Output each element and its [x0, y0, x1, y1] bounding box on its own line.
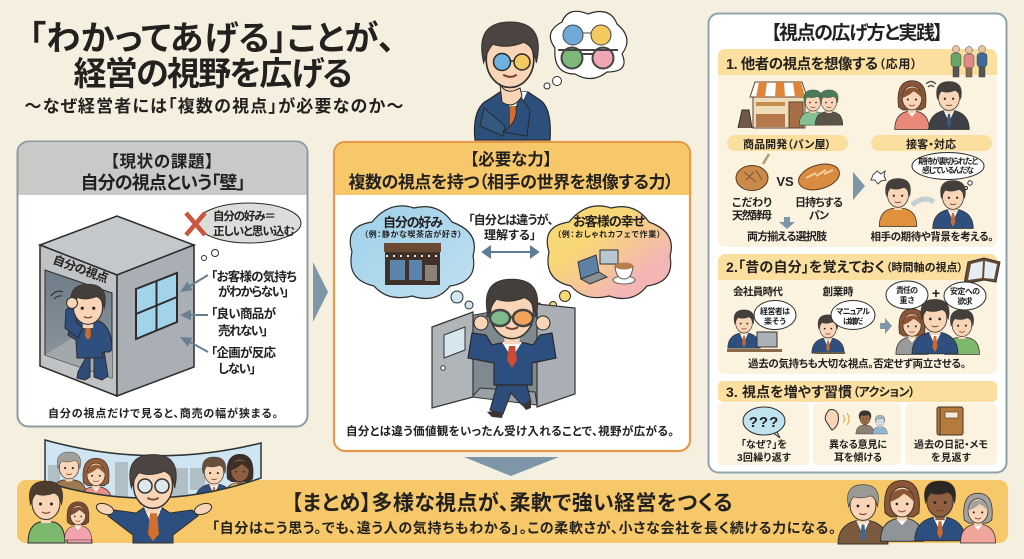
quotes list: 「お客様の気持ち — [211, 269, 297, 284]
group of four people — [838, 481, 996, 544]
speech bubble: manuals — [831, 300, 875, 330]
arrow: issue to solution — [313, 262, 328, 322]
arrow: chevron — [853, 172, 865, 200]
labels: past selves — [733, 285, 854, 298]
section subheading: （アクション） — [853, 385, 915, 399]
speech bubble: stability: 欲求 — [958, 296, 972, 306]
illustration: office worker — [727, 310, 782, 352]
speech bubble: customer feelings: 期待が裏切られたと — [918, 156, 978, 166]
labels: past selves: 創業時 — [822, 285, 854, 298]
cafe building — [384, 243, 441, 285]
summary band — [17, 440, 1008, 544]
cloud: own preference — [350, 206, 474, 298]
cell: look back: を見返す — [931, 451, 972, 464]
title: 経営の視野を広げる — [74, 55, 352, 92]
pill: customer service: 接客・対応 — [906, 137, 956, 151]
multi-colour glasses — [486, 310, 538, 326]
cloud: customer happiness: （例：おしゃれカフェで作業） — [557, 229, 661, 239]
section subheading: （応用） — [879, 57, 917, 71]
quotes list — [211, 269, 297, 376]
icon: album — [964, 258, 1000, 284]
caption: 自分とは違う価値観をいったん受け入れることで、視野が広がる。 — [346, 424, 674, 438]
quotes list: 「良い商品が — [211, 306, 277, 321]
text: both choices: 両方揃える選択肢 — [747, 229, 827, 243]
quote: understand — [468, 212, 554, 242]
illustration: customer and staff — [895, 81, 969, 130]
cell: listen: 異なる意見に — [829, 438, 887, 451]
box label: 自分の視点 — [51, 252, 111, 286]
speech bubble: managers: 楽そう — [764, 316, 786, 326]
quotes list: 売れない」 — [218, 323, 268, 338]
pill: product development: 商品開発（パン屋） — [743, 137, 831, 151]
pill: product development — [727, 135, 848, 151]
arrow: mutual understanding — [483, 247, 538, 257]
panel: required power — [334, 142, 690, 451]
cell: ask why: 「なぜ？」を — [741, 438, 787, 451]
panel heading: 自分の視点という「壁」 — [80, 173, 246, 193]
section heading: 1. 他者の視点を想像する — [726, 55, 878, 73]
illustration: team — [896, 299, 980, 354]
arrows to window quotes — [180, 275, 208, 352]
title: ～なぜ経営者には「複数の視点」が必要なのか～ — [24, 96, 404, 116]
arrow: down — [779, 217, 795, 229]
illustration: bakery — [738, 82, 843, 128]
panel heading: 【現状の課題】 — [110, 152, 214, 171]
panel heading: 複数の視点を持つ（相手の世界を想像する力） — [348, 172, 674, 192]
icon: three people — [951, 46, 987, 77]
cell: ask why: 3回繰り返す — [737, 451, 792, 464]
illustration: thinking manager with glasses — [475, 11, 627, 140]
title: 「わかってあげる」ことが、 — [29, 19, 395, 58]
speech bubble: managers — [754, 300, 796, 330]
section 3 — [718, 381, 997, 465]
cell: ask why — [718, 403, 809, 465]
section 1 — [718, 46, 997, 247]
thought cloud with four lenses — [544, 11, 627, 89]
pill: customer service — [871, 135, 992, 151]
labels: past selves: 会社員時代 — [733, 285, 784, 298]
jacket — [468, 333, 556, 385]
panel heading: 【必要な力】 — [470, 150, 552, 169]
summary heading: 【まとめ】多様な視点が、柔軟で強い経営をつくる — [292, 491, 732, 515]
text: past feelings: 過去の気持ちも大切な視点。否定せず両立させる。 — [748, 357, 966, 370]
thought bubble: belief — [197, 203, 301, 260]
legs — [490, 385, 531, 414]
speech bubble: customer feelings: 感じているんだな — [922, 165, 974, 175]
section heading: 2.「昔の自分」を覚えておく — [726, 259, 885, 275]
quote: understand: 理解する」 — [484, 227, 536, 242]
section subheading: （時間軸の視点） — [886, 260, 963, 274]
illustration: man stepping out of the box — [432, 279, 575, 418]
tinted glasses on face — [494, 54, 530, 70]
window — [136, 273, 177, 339]
worried man — [51, 284, 112, 380]
speech bubble: responsibility — [886, 281, 928, 309]
illustration: staff understanding — [912, 180, 973, 228]
children — [28, 481, 92, 543]
label: versus: VS — [776, 174, 794, 189]
quotes list: 「企画が反応 — [211, 345, 276, 360]
cell: ask why: ??? — [749, 414, 779, 431]
speech bubble: managers: 経営者は — [760, 306, 790, 316]
cloud: customer happiness — [547, 206, 671, 298]
title — [24, 19, 404, 116]
panel heading: 【視点の広げ方と実践】 — [771, 21, 943, 44]
illustration: isometric box with man — [40, 216, 194, 396]
arrow: down to summary — [464, 457, 559, 476]
bread labels: 日持ちする — [795, 195, 843, 209]
speech bubble: responsibility: 責任の — [896, 285, 918, 295]
icon: red cross — [186, 213, 205, 235]
speech bubble: manuals: は嫌だ — [843, 316, 863, 326]
speech bubble: stability — [944, 282, 986, 310]
icon: long loaf — [796, 160, 842, 194]
panorama of diverse people — [45, 440, 261, 504]
icon: laptop, tablet and latte — [578, 250, 635, 284]
plus sign: + — [932, 285, 940, 301]
section 2 — [718, 254, 1000, 374]
panel heading — [80, 152, 246, 193]
thought bubble: belief: 正しいと思い込む — [213, 225, 295, 238]
quote: understand: 「自分とは違うが、 — [468, 212, 554, 227]
text: consider expectations: 相手の期待や背景を考える。 — [870, 230, 994, 243]
bread labels: 天然酵母 — [732, 208, 772, 222]
illustration: founder at desk — [812, 315, 845, 354]
icon: artisan loaf — [736, 154, 769, 190]
panel: current issue — [18, 142, 308, 426]
speech bubble: stability: 安定への — [950, 286, 980, 296]
speech bubble: manuals: マニュアル — [836, 307, 870, 316]
speech bubble: customer feelings — [912, 152, 984, 190]
cell: look back: 過去の日記・メモ — [914, 438, 988, 451]
summary text: 「自分はこう思う。でも、違う人の気持ちもわかる」。この柔軟さが、小さな会社を長く続ける力になる。 — [212, 520, 836, 536]
panel heading — [348, 150, 674, 192]
section heading: 3. 視点を増やす習慣 — [726, 384, 852, 400]
speaker with open arms — [95, 455, 213, 543]
arrow: right — [880, 318, 892, 334]
thought dots — [451, 290, 570, 309]
cloud: own preference: 自分の好み — [383, 215, 443, 230]
cloud: customer happiness: お客様の幸せ — [573, 214, 646, 229]
thought bubble: belief: 自分の好み＝ — [213, 209, 276, 223]
cell: listen — [813, 403, 901, 465]
quotes list: がわからない」 — [218, 284, 289, 299]
cloud: own preference: （例：静かな喫茶店が好き） — [364, 229, 462, 239]
speech bubble: responsibility: 重さ — [900, 295, 914, 305]
panel: how to widen viewpoints — [708, 14, 1006, 472]
caption: 自分の視点だけで見ると、商売の幅が狭まる。 — [48, 406, 278, 420]
illustration: angry customer — [871, 171, 917, 226]
cell: listen: 耳を傾ける — [834, 451, 882, 464]
bread labels — [732, 195, 843, 222]
cell: look back — [905, 403, 997, 465]
bread labels: パン — [809, 209, 829, 222]
quotes list: しない」 — [218, 362, 256, 376]
bread labels: こだわり — [732, 196, 772, 209]
